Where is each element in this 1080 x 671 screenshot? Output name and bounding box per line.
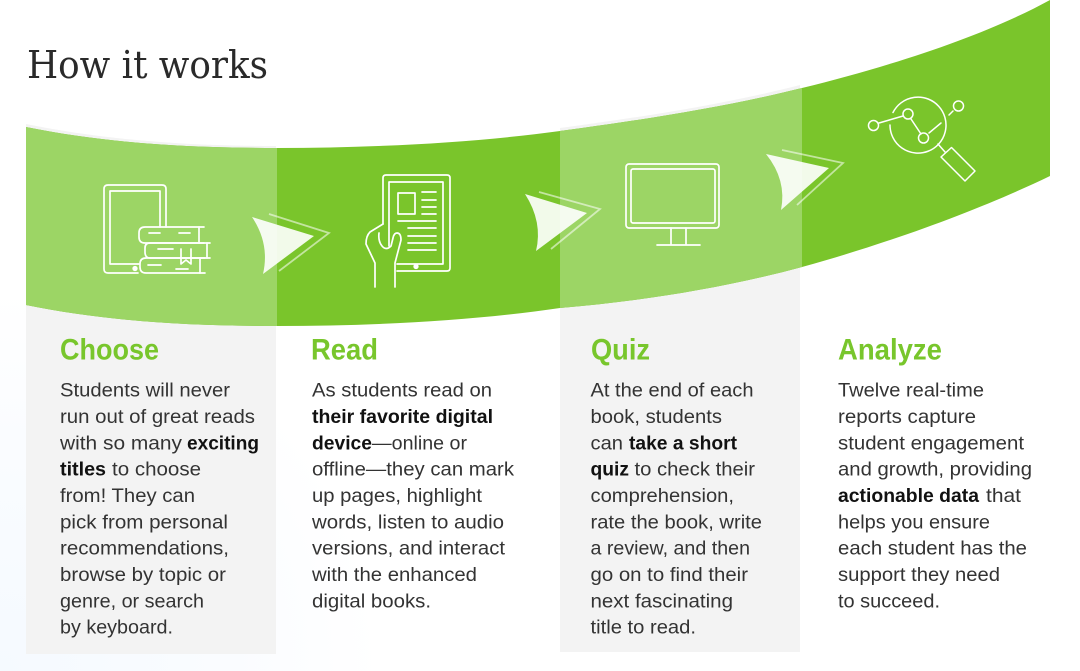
text block: analyze: Twelve real-time [838, 380, 984, 402]
arrow: choose to read [252, 214, 329, 274]
icon: hand holding tablet [366, 175, 450, 287]
curved green band [26, 0, 1050, 326]
text block: choose [59, 380, 259, 639]
step: read [311, 334, 514, 612]
text block: choose: browse by topic or [60, 564, 227, 586]
text block: read: their favorite digital [312, 406, 493, 428]
text block: quiz: can [590, 432, 623, 454]
text block: quiz: to check their [634, 459, 756, 481]
icon: tablet and books [104, 185, 210, 273]
icon: magnifier with data points [868, 97, 975, 181]
arrow: read to quiz [525, 192, 600, 251]
text block: quiz: title to read. [590, 617, 696, 639]
panel: choose background [26, 124, 276, 654]
text block: read: up pages, highlight [312, 485, 483, 507]
text block: analyze: actionable data [838, 485, 979, 507]
text block: analyze: student engagement [838, 432, 1025, 454]
title: How it works [27, 43, 268, 87]
text block: read: As students read on [312, 380, 492, 402]
text block: choose: genre, or search [60, 590, 204, 612]
arrow: quiz to analyze [766, 150, 843, 210]
heading: choose: Choose [60, 334, 159, 366]
text block: quiz: book, students [590, 406, 722, 428]
text block: choose: from! They can [60, 485, 195, 507]
text block: analyze: and growth, providing [838, 459, 1032, 481]
heading: read: Read [311, 334, 378, 366]
text block: choose: pick from personal [60, 511, 228, 533]
text block: analyze: support they need [838, 564, 1000, 586]
text block: analyze: to succeed. [838, 590, 940, 612]
text block: choose: by keyboard. [60, 617, 173, 639]
text block: read [311, 380, 514, 612]
text block: read: digital books. [312, 590, 431, 612]
heading: quiz: Quiz [591, 334, 650, 366]
text block: analyze [838, 380, 1032, 612]
text block: choose: titles [60, 459, 106, 481]
text block: choose: with so many [59, 432, 182, 454]
heading: analyze: Analyze [838, 334, 942, 366]
step: quiz [590, 334, 762, 639]
text block: quiz: rate the book, write [590, 511, 762, 533]
text block: quiz: a review, and then [590, 538, 750, 560]
text block: read: —online or [372, 432, 467, 454]
text block: analyze: helps you ensure [838, 511, 990, 533]
step: choose [59, 334, 259, 639]
text block: quiz: At the end of each [590, 380, 754, 402]
text block: analyze: reports capture [838, 406, 976, 428]
text block: choose: Students will never [60, 380, 231, 402]
icon: computer monitor [626, 164, 719, 245]
text block: choose: recommendations, [60, 538, 229, 560]
text block: quiz: comprehension, [590, 485, 734, 507]
text block: choose: exciting [187, 432, 259, 454]
text block: read: device [312, 432, 372, 454]
text block: quiz: take a short [629, 432, 737, 454]
text block: analyze: each student has the [838, 538, 1027, 560]
text block: choose: run out of great reads [60, 406, 255, 428]
text block: read: words, listen to audio [311, 511, 504, 533]
text block: read: versions, and interact [312, 538, 506, 560]
text block: quiz [590, 380, 762, 639]
step: analyze [838, 334, 1032, 612]
text block: read: with the enhanced [311, 564, 477, 586]
text block: quiz: quiz [590, 459, 629, 481]
text block: quiz: next fascinating [590, 590, 733, 612]
text block: analyze: that [986, 485, 1022, 507]
text block: read: offline—they can mark [312, 459, 514, 481]
text block: quiz: go on to find their [590, 564, 749, 586]
text block: choose: to choose [112, 459, 201, 481]
panel: quiz background [560, 85, 800, 652]
